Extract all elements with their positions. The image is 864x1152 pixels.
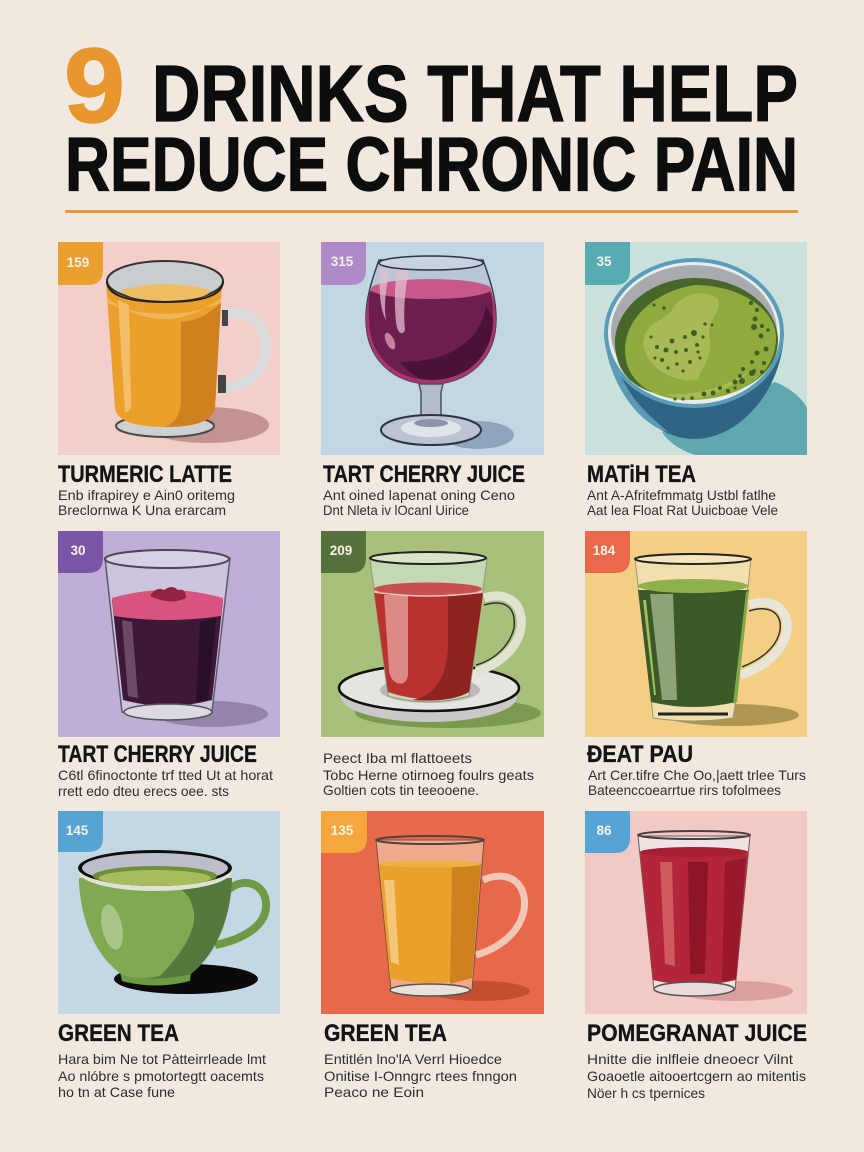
text: middle column: Tobc Herne otirnoeg foulrs geats: [323, 767, 534, 783]
badge: 35: [596, 254, 612, 269]
text: green tea: Ao nlóbre s pmotortegtt oacemts: [58, 1068, 264, 1084]
badge: [321, 531, 366, 573]
text: green tea 2: Onitise I-Onngrc rtees fnngon: [324, 1068, 517, 1084]
badge: [585, 242, 630, 285]
panel: tart cherry juice glass: [58, 531, 280, 737]
badge: 184: [593, 543, 616, 558]
text: green tea 2: Entitlén lno'lA Verrl Hioedce: [324, 1051, 502, 1067]
panel: green drink glass mug: [585, 531, 807, 737]
icon: saucer: [339, 665, 519, 722]
icon: mug handle: [740, 602, 787, 675]
text: pomegranate juice: Hnitte die inlfleie dneoecr Vilnt: [587, 1051, 793, 1067]
icon: mug: [106, 261, 223, 437]
icon: bowl: [604, 258, 784, 439]
text: matcha tea: [587, 487, 778, 518]
icon: wine glass: [366, 256, 496, 445]
shadow: [355, 698, 541, 728]
text: matcha tea: Ant A-Afritefmmatg Ustbl fatlhe: [587, 487, 776, 503]
text: turmeric latte: Breclornwa K Una erarcam: [58, 502, 226, 518]
badge: 30: [70, 543, 86, 558]
text: green tea: [58, 1051, 266, 1100]
heading: turmeric latte: TURMERIC LATTE: [58, 461, 232, 488]
heading: green tea 2: GREEN TEA: [324, 1020, 447, 1047]
panel: turmeric latte: [58, 242, 280, 455]
text: pomegranate juice: Goaoetle aitooertcgern ao mitentis: [587, 1068, 806, 1084]
shadow: [145, 407, 269, 443]
heading: pomegranate juice: POMEGRANAT JUICE: [587, 1020, 807, 1047]
text: green tea 2: [324, 1051, 517, 1100]
shadow: [430, 981, 530, 1001]
text: middle column: Peect Iba ml flattoeets: [323, 750, 472, 766]
heading: tart cherry juice 2: TART CHERRY JUICE: [58, 741, 257, 768]
icon: juice glass: [105, 550, 230, 720]
text: middle column: [323, 750, 534, 798]
heading: green tea: GREEN TEA: [58, 1020, 179, 1047]
badge: [58, 811, 103, 852]
badge: [321, 811, 367, 853]
text: tart cherry juice: Dnt Nleta iv lOcanl Uirice: [323, 502, 469, 518]
panel: matcha tea: [585, 242, 807, 455]
icon: mug handle: [218, 310, 266, 393]
badge: 209: [330, 543, 352, 558]
icon: cup handle: [215, 883, 266, 945]
text: turmeric latte: [58, 487, 235, 518]
text: turmeric latte: Enb ifrapirey e Ain0 oritemg: [58, 487, 235, 503]
panel: red tea mug on saucer: [321, 531, 544, 737]
icon: juice glass: [638, 831, 750, 996]
badge: [585, 811, 630, 853]
shadow: [442, 421, 514, 449]
text: tart cherry juice 2: rrett edo dteu erecs oee. sts: [58, 783, 229, 799]
badge: [58, 531, 103, 573]
panel: tart cherry juice wine glass: [321, 242, 544, 455]
badge: [585, 531, 630, 573]
text: tart cherry juice 2: C6tl 6finoctonte trf tted Ut at horat: [58, 767, 273, 783]
text: green tea: ho tn at Case fune: [58, 1084, 175, 1100]
text: matcha tea: Aat lea Float Rat Uuicboae Vele: [587, 502, 778, 518]
shadow: [677, 981, 793, 1001]
text: deat pau: Art Cer.tifre Che Oo,|aett trlee Turs: [588, 767, 806, 783]
badge: 86: [596, 823, 612, 838]
text: tart cherry juice: Ant oined lapenat oning Ceno: [323, 487, 515, 503]
shadow: [114, 964, 258, 994]
panel: green tea cup: [58, 811, 280, 1014]
text: green tea 2: Peaco ne Eoin: [324, 1084, 424, 1100]
icon: glass mug: [370, 552, 487, 702]
badge: 135: [331, 823, 354, 838]
heading: tart cherry juice: TART CHERRY JUICE: [323, 461, 525, 488]
text: tart cherry juice 2: [58, 767, 273, 799]
text: tart cherry juice: [323, 487, 515, 518]
text: deat pau: Bateenccoearrtue rirs tofolmees: [588, 782, 781, 798]
shadow: [665, 704, 799, 726]
heading: matcha tea: MATiH TEA: [587, 461, 696, 488]
text: middle column: Goltien cots tin teeooene.: [323, 782, 479, 798]
badge: 315: [331, 254, 354, 269]
badge: [321, 242, 366, 285]
shadow: [662, 382, 807, 455]
badge: [58, 242, 103, 285]
icon: glass mug: [376, 836, 484, 996]
badge: 145: [66, 823, 89, 838]
icon: mug handle: [476, 876, 525, 955]
shadow: [156, 701, 268, 727]
text: pomegranate juice: [587, 1051, 806, 1101]
matcha speckles: [650, 301, 770, 401]
panel: orange juice glass mug: [321, 811, 544, 1014]
heading: deat pau: ÐEAT PAU: [587, 741, 693, 768]
icon: glass mug: [635, 554, 751, 721]
title: 9: [64, 27, 125, 145]
icon: green cup: [78, 850, 232, 986]
badge: 159: [67, 255, 89, 270]
icon: mug handle: [476, 596, 521, 672]
text: green tea: Hara bim Ne tot Pàtteirrleade lmt: [58, 1051, 266, 1067]
title: [64, 27, 798, 208]
text: pomegranate juice: Nöer h cs tpernices: [587, 1085, 705, 1101]
text: deat pau: [588, 767, 806, 798]
panel: pomegranate juice: [585, 811, 807, 1014]
